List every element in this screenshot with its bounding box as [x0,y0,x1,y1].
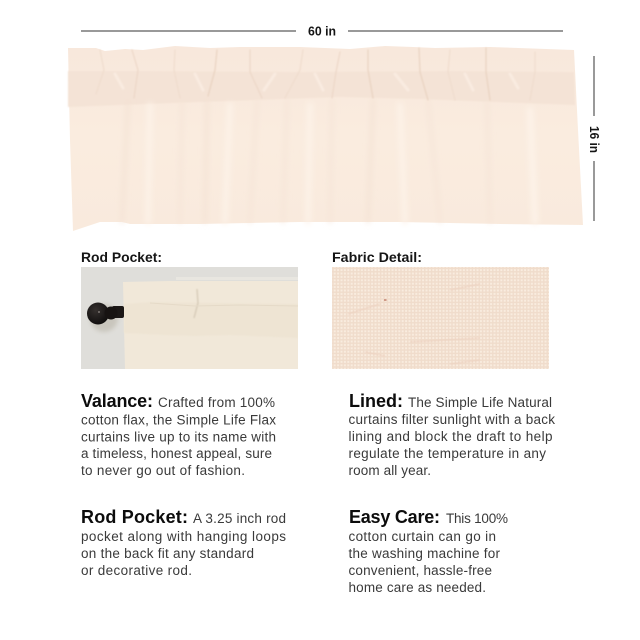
text block: Rod Pocket: on the back fit any standard [81,546,254,561]
pocket band [124,302,298,338]
text block: Valance: Crafted from 100% [158,395,275,410]
text block: Easy Care: the washing machine for [348,546,500,561]
curtain body [68,46,583,231]
rod pocket band [68,71,575,107]
gathers along pocket [96,48,535,100]
text block: Lined: lining and block the draft to help [348,429,552,444]
text block: Rod Pocket: or decorative rod. [81,563,192,578]
vertical folds [122,100,535,222]
photo: fabric weave detail [332,267,549,369]
text block: Lined: room all year. [348,463,431,478]
text block: Lined: curtains filter sunlight with a back [348,412,555,427]
height dimension: 16 in: 16 in [587,126,601,153]
text block: Valance: curtains live up to its name with [81,430,276,444]
text block: Rod Pocket: pocket along with hanging loops [81,529,286,544]
text block: Easy Care: home care as needed. [348,580,486,595]
text block: Rod Pocket: Rod Pocket: [81,507,188,527]
text block: Rod Pocket: A 3.25 inch rod [193,511,286,526]
text block: Lined: regulate the temperature in any [348,446,546,461]
text block: Valance: a timeless, honest appeal, sure [81,446,272,461]
text block: Easy Care [348,507,508,595]
photo: rod pocket with finial [81,267,298,369]
text block: Easy Care: Easy Care: [349,507,440,527]
width dimension: 60 in: 60 in [308,24,336,38]
text block: Easy Care: This 100% [446,511,508,526]
valance curtain photo [68,46,583,231]
text block: Easy Care: convenient, hassle-free [348,563,492,578]
text block: Valance: cotton flax, the Simple Life Flax [81,412,276,428]
text block: Valance [81,391,276,478]
heading: Rod Pocket: Rod Pocket: [81,249,162,265]
curtain panel [123,281,298,369]
text block: Easy Care: cotton curtain can go in [348,529,496,544]
text block: Lined [348,391,555,478]
rod finial [87,302,124,332]
heading: Fabric Detail: Fabric Detail: [332,249,422,265]
text block: Lined: The Simple Life Natural [408,395,552,410]
text block: Lined: Lined: [349,391,403,411]
text block: Rod Pocket [81,507,286,578]
text block: Valance: to never go out of fashion. [81,463,245,478]
text block: Valance: Valance: [81,391,153,411]
wall background [81,267,298,369]
